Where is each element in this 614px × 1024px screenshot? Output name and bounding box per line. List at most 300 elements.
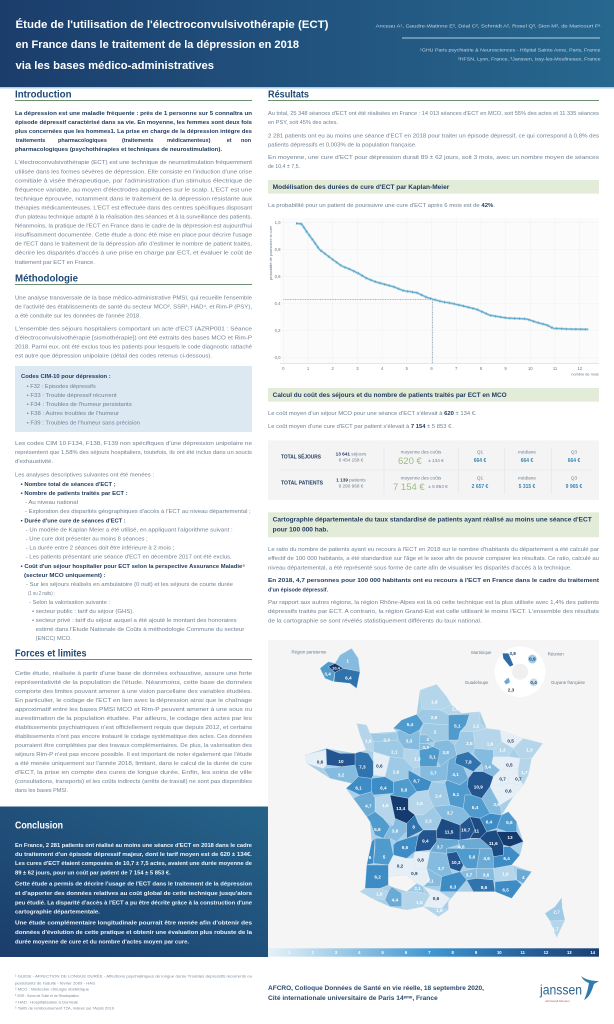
method note on codes: Les codes CIM 10 F134, F138, F139 non spécifiques d'une dépression unipolaire ne: [15, 441, 252, 447]
map: dark department values: 0,6: [505, 789, 512, 794]
intro key message: non: [241, 138, 252, 144]
colour scale legend: 3: [335, 950, 338, 955]
x axis labels: 8: [480, 366, 483, 371]
list of descriptive analyses: [15, 473, 251, 642]
list of descriptive analyses: (secteur MCO uniquement) :: [24, 573, 106, 579]
heading: résultats: Résultats: [268, 90, 309, 100]
intro key message: médicamenteux): [167, 138, 211, 144]
colour scale legend: 10: [497, 950, 502, 955]
y axis labels: [269, 220, 281, 360]
cartography text: [268, 547, 599, 624]
row: total patients: 7 154 €: [393, 482, 425, 493]
map: light department values: 1,7: [521, 770, 528, 775]
map: light department values: 1,6: [487, 742, 494, 747]
forces et limites body text: a été menée uniquement sur l'année 2018, limitant, dans le calcul de la durée de cure: [15, 761, 252, 767]
map: light department values: 3,3: [406, 739, 413, 744]
method note on codes: [15, 441, 252, 465]
cartography text: d'un épisode dépressif.: [268, 587, 328, 593]
title: [16, 18, 329, 72]
map: light department values: 3,8: [442, 750, 449, 755]
map: light department values: 1,3: [452, 707, 459, 712]
x axis labels: 1: [307, 366, 310, 371]
intro key message: [15, 111, 253, 153]
map: light department values: 4,6: [483, 856, 490, 861]
map: light department values: 10: [338, 759, 344, 764]
forces et limites body text: (consultations, transports) et les coûts indirects (arrêts de travail) ne sont pas disponibles: [15, 779, 252, 785]
row: total séjours: 8 454 158 €: [339, 457, 364, 462]
map: light department values: 3,7: [437, 845, 444, 850]
forces et limites body text: [15, 671, 253, 794]
callout: codes CIM-10: • F32 : Episodes dépressifs: [27, 384, 96, 390]
title: en France dans le traitement de la dépression en 2018: [16, 39, 299, 51]
row: total patients: 8 290 968 €: [339, 483, 364, 488]
conclusion paragraphs: Une étude complémentaire longitudinale pourrait être menée afin d'obtenir des: [15, 921, 252, 927]
intro body text: insuffisamment documentée. Cette étude a donc été mise en place pour décrire l'usage: [15, 233, 252, 239]
forces et limites body text: Cette étude, réalisée à partir d'une base de données exhaustive, assure une forte: [15, 671, 252, 677]
map: light department values: 1,8: [376, 892, 383, 897]
subheading: Kaplan-Meier: Modélisation des durées de cure d'ECT par Kaplan-Meier: [273, 184, 450, 191]
x axis labels: 2: [332, 366, 335, 371]
map: light department values: 3,4: [484, 764, 491, 769]
map: light department values: 2,6: [431, 715, 438, 720]
map: light department values: 6,3: [450, 884, 457, 889]
colour scale legend: 2: [312, 950, 315, 955]
row: total patients: ± 5 853 €: [428, 484, 448, 489]
map: light department values: 5,6: [506, 820, 513, 825]
row: total séjours: [281, 450, 580, 467]
footer conference reference: AFCRO, Colloque Données de Santé en vie réelle, 18 septembre 2020,: [268, 985, 484, 992]
cartography text: effectif de 100 000 habitants, a été standardisé sur l'âge et le sexe afin de pouvoir comparer les résultats. Ce ratio, calculé au: [268, 556, 599, 562]
map: light department values: 2,1: [391, 749, 398, 754]
map: light department values: 6,7: [413, 778, 420, 783]
intro body text: d'un plateau technique adapté à la réalisation des séances et à la surveillance des patients.: [15, 215, 252, 221]
affiliations: ²HFSN, Lyon, France, ³Janssen, Issy-les-Moulineaux, France: [458, 56, 601, 62]
y axis labels: 0,0: [275, 355, 281, 360]
map: light department values: 10,9: [474, 784, 483, 789]
method paragraph one: Une analyse transversale de la base médico-administrative PMSI, qui recueille l'ensemble: [15, 296, 252, 302]
y axis labels: 0,4: [275, 301, 281, 306]
list of descriptive analyses: (ENCC) MCO.: [36, 636, 72, 642]
conclusion paragraphs: En France, 2 281 patients ont réalisé au moins une séance d'ECT en 2018 dans le cadre: [15, 843, 252, 849]
logo: janssen: Johnson&Johnson: [545, 999, 570, 1003]
map: dark department values: 0,8: [417, 858, 424, 863]
list of descriptive analyses: • Durée d'une cure de séances d'ECT :: [21, 519, 126, 525]
panel: méthodologie: [15, 274, 253, 642]
title: via les bases médico-administratives: [16, 60, 214, 72]
inset: overseas departments: [465, 646, 586, 697]
colour scale legend: 4: [358, 950, 361, 955]
panel: conclusion: [0, 806, 268, 957]
callout: codes CIM-10: • F34 : Troubles de l'humeur persistants: [27, 402, 132, 408]
map: light department values: 6,4: [503, 856, 510, 861]
map: dark department values: 0,7: [499, 777, 506, 782]
map: light department values: 1,6: [416, 801, 423, 806]
map: light department values: 5,4: [407, 722, 414, 727]
map: light department values: 5,6: [469, 854, 476, 859]
conclusion paragraphs: données d'évolution de cette pratique et obtenir une évaluation plus robuste de la: [15, 930, 253, 936]
intro key message: plus concernées que les hommes1. La prise en charge de la dépression intègre des: [15, 129, 252, 135]
map: mainland departments: [305, 684, 565, 938]
map: light department values: 3,7: [447, 810, 454, 815]
inset: overseas departments: Guyane française: [551, 680, 586, 685]
list of descriptive analyses: - Un modèle de Kaplan Meier a été utilisé, en appliquant l'algorithme suivant :: [26, 528, 233, 534]
cartography text: Par rapport aux autres régions, la région Rhône-Alpes est là où cette technique est la plus utilisée avec 1,4% des patients: [268, 600, 599, 606]
subheading: cartographie: Cartographie départementale du taux standardisé de patients ayant réalisé au moins une séance d'ECT: [273, 516, 592, 523]
inset: région parisienne: 3,4: [324, 672, 331, 677]
colour scale legend: [268, 948, 599, 957]
subheading: cartographie: pour 100 000 hab.: [273, 526, 329, 533]
map: light department values: 3,6: [483, 873, 490, 878]
y axis labels: 1,0: [275, 220, 281, 225]
cost statements: Le coût moyen d'une cure d'ECT par patient s'élevait à 7 154 ± 5 853 €.: [268, 424, 454, 430]
title: Étude de l'utilisation de l'électroconvulsivothérapie (ECT): [16, 18, 329, 31]
map: light department values: 1,9: [502, 871, 509, 876]
inset: région parisienne: 1: [346, 658, 349, 663]
cartography text: niveau départemental, a été représenté sous forme de carte afin de visualiser les disparités d'accès à la technique.: [268, 565, 572, 571]
subheading: cost: [268, 388, 599, 402]
map: light department values: 1,6: [436, 908, 443, 913]
footnotes: ⁵ Tarifs de remboursement T2A, indexé sur l'Assis 2019: [15, 1006, 114, 1010]
heading: introduction: Introduction: [15, 90, 72, 100]
map: light department values: 1,1: [473, 724, 480, 729]
inset: région parisienne: Région parisienne: [292, 650, 327, 655]
intro body text: de l'ECT dans le traitement de la dépression afin d'estimer le nombre de patient traités,: [15, 242, 253, 248]
cartography text: En 2018, 4,7 personnes pour 100 000 habitants ont eu recours à l'ECT en France dans le cadre du traitement: [268, 578, 599, 584]
results summary text: En moyenne, une cure d'ECT pour dépression durait 89 ± 62 jours, soit 3 mois, avec un nombre moyen de séances: [268, 155, 599, 161]
row: total patients: moyenne des coûts: [401, 476, 442, 481]
results summary text: patients dépressifs et 0,003% de la population française.: [268, 143, 417, 149]
map: dark department values: 0,5: [506, 763, 513, 768]
map: dark department values: 0,9: [411, 871, 418, 876]
map: light department values: 3,1: [427, 879, 434, 884]
row: total séjours: 620 €: [398, 456, 422, 467]
map: light department values: 6,2: [374, 875, 381, 880]
colour scale legend: 11: [520, 950, 526, 955]
results summary text: 2 281 patients ont eu au moins une séance d'ECT en 2018 pour traiter un épisode dépressif, ce qui correspond à 0,8% des: [268, 134, 599, 140]
panel: map of France: [268, 640, 599, 948]
inset: overseas departments: 0,4: [530, 680, 537, 685]
map: light department values: 3,7: [430, 770, 437, 775]
map: light department values: 5,8: [401, 788, 408, 793]
map: light department values: 5,1: [454, 724, 461, 729]
list of descriptive analyses: Les analyses descriptives suivantes ont été menées :: [15, 473, 154, 479]
list of descriptive analyses: • secteur public : tarif du séjour (GHS).: [32, 609, 135, 615]
row: total séjours: 664 €: [474, 458, 486, 464]
logo: janssen: janssen: [539, 982, 582, 998]
method paragraph one: de l'activité des établissements de santé du secteur MCO², SSR³, HAD⁴, et Rim-P (PSY),: [15, 304, 253, 311]
map: light department values: 1,3: [526, 748, 533, 753]
subheading: cost: Calcul du coût des séjours et du nombre de patients traités par ECT en MCO: [273, 392, 507, 399]
map: dark department values: 0,2: [397, 864, 404, 869]
Kaplan-Meier statement: La probabilité pour un patient de poursuivre une cure d'ECT après 6 mois est de 42%.: [268, 203, 496, 209]
list of descriptive analyses: (1 ou 2 nuits) ;: [28, 591, 55, 597]
callout: codes CIM-10: • F39 : Troubles de l'humeur sans précision: [27, 421, 140, 427]
map: light department values: 9,4: [422, 839, 429, 844]
callout: codes CIM-10: • F38 : Autres troubles de l'humeur: [27, 411, 119, 417]
intro body text: thérapies médicamenteuses. L'ECT est effectuée dans des centres spécifiques disposant: [15, 206, 253, 212]
map: light department values: 6,4: [380, 785, 387, 790]
heading: méthodologie: Méthodologie: [15, 274, 78, 284]
results summary text: Au total, 25 348 séances d'ECT ont été réalisées en France : 14 013 séances d'ECT en MCO, soit 55% des actes et 11 335 séances: [268, 111, 599, 117]
map: light department values: 3: [426, 737, 429, 742]
x axis labels: [282, 366, 599, 376]
row: total séjours: moyenne des coûts: [401, 450, 442, 455]
conclusion paragraphs: cartographie départementale.: [15, 909, 100, 915]
map: light department values: 4: [522, 875, 525, 880]
conclusion paragraphs: du traitement d'un épisode dépressif majeur, dont le tarif moyen est de 620 ± 134€.: [15, 852, 252, 858]
map: light department values: 3,8: [392, 829, 399, 834]
forces et limites body text: approximatif entre les bases PMSI MCO et Rim-P peuvent amener à une sous ou: [15, 707, 252, 713]
map: light department values: 2,3: [425, 819, 432, 824]
colour scale legend: 5: [382, 950, 385, 955]
x axis labels: 12: [577, 366, 583, 371]
header banner: [0, 0, 614, 88]
map: light department values: 13: [507, 835, 513, 840]
intro key message: pharmacologiques (psychothérapies et techniques de neurostimulation).: [15, 147, 223, 153]
map: light department values: 10,3: [451, 860, 461, 865]
map: Corsica values: 1,7: [552, 927, 559, 932]
heading: forces et limites: Forces et limites: [15, 648, 87, 660]
cartography text: Le ratio du nombre de patients ayant eu recours à l'ECT en 2018 sur le nombre d'habitants du département a été calculé par: [268, 547, 599, 553]
map: light department values: 7,3: [359, 764, 366, 769]
footnotes: persistants de l'adulte - février 2009 - HAS: [15, 982, 96, 986]
list of descriptive analyses: • Nombre de patients traités par ECT :: [21, 491, 128, 497]
x axis labels: 4: [381, 366, 384, 371]
map: dark department values: 0,7: [515, 777, 522, 782]
map: light department values: 5,1: [429, 754, 436, 759]
intro body text: Néanmoins, la pratique de l'ECT en France dans le cadre de la dépression est aujourd'hui: [15, 224, 252, 230]
map: dark department values: 0,6: [317, 759, 324, 764]
map: light department values: 4,4: [392, 898, 399, 903]
map: light department values: 2,3: [383, 738, 390, 743]
method paragraph one: a été conduite sur les données de l'année 2018.: [15, 314, 141, 320]
callout: codes CIM-10: Codes CIM-10 pour dépression :: [21, 374, 111, 380]
forces et limites body text: dans les bases PMSI.: [15, 788, 68, 794]
row: total patients: 2 657 €: [472, 484, 489, 490]
forces et limites body text: représentativité de la population de l'étude. Néanmoins, cette base de données: [15, 680, 252, 686]
colour scale legend: 13: [567, 950, 572, 955]
forces et limites body text: séjours Rim-P n'est pas encore possible. Il est important de noter également que l'étude: [15, 752, 252, 758]
chart: Kaplan-Meier curve: [269, 218, 599, 376]
row: total séjours: ± 134 €: [428, 458, 444, 463]
x axis labels: 11: [553, 366, 558, 371]
map: light department values: 2,5: [466, 741, 473, 746]
map: dark department values: 0,6: [376, 764, 383, 769]
row: total patients: 1 139 patients: [336, 477, 366, 482]
forces et limites body text: comporte des limites pouvant amener à une vision parcellaire des variables étudiées.: [15, 689, 253, 695]
y axis labels: 0,2: [275, 328, 281, 333]
list of descriptive analyses: - La durée entre 2 séances doit être inférieure à 2 mois ;: [26, 546, 175, 552]
panel: forces et limites: [15, 648, 253, 794]
method paragraph one: [15, 296, 253, 320]
results summary text: [268, 111, 599, 170]
inset: région parisienne: 6,4: [345, 675, 352, 680]
map: light department values: 7,8: [465, 759, 472, 764]
map: light department values: 5,4: [472, 805, 479, 810]
footer conference reference: Cité internationale universitaire de Paris 14ᵉᵐᵉ, France: [268, 995, 438, 1002]
method paragraph two: [15, 327, 252, 360]
callout: codes CIM-10: • F33 : Trouble dépressif récurrent: [27, 393, 117, 399]
intro key message: La dépression est une maladie fréquente : près de 1 personne sur 5 connaîtra un: [15, 111, 253, 117]
map: light department values: 4,7: [365, 804, 372, 809]
list of descriptive analyses: • Coût d'un séjour hospitalier pour ECT selon la perspective Assurance Maladie⁵: [21, 564, 245, 570]
forces et limites body text: établissements n'ont pas encore instauré le codage systématique des actes. Ces données: [15, 734, 252, 740]
intro body text: fréquence variable, au moyen d'électrodes appliquées sur le scalp. L'ECT est une: [15, 188, 252, 194]
colour scale legend: 6: [405, 950, 408, 955]
row: total patients: 9 965 €: [566, 484, 583, 490]
conclusion paragraphs: Cette étude a permis de décrire l'usage de l'ECT dans le traitement de la dépression: [15, 882, 253, 888]
x axis labels: 9: [504, 366, 507, 371]
conclusion paragraphs: peu étudié. La disparité d'accès à l'ECT a pu être décrite grâce à la construction d'une: [15, 900, 252, 906]
map: dark department values: 0,5: [507, 739, 514, 744]
conclusion paragraphs: et d'apporter des données relatives au coût global de cette technique jusqu'alors: [15, 891, 252, 897]
colour scale legend: 8: [452, 950, 455, 955]
row: total patients: Q3: [571, 476, 578, 481]
list of descriptive analyses: - Sur les séjours réalisés en ambulatoire (0 nuit) et les séjours de courte durée: [26, 582, 233, 588]
x axis labels: 7: [455, 366, 458, 371]
heading: conclusion: Conclusion: [15, 820, 63, 832]
forces et limites body text: pourraient être complétées par des travaux complémentaires. De plus, la valorisation des: [15, 743, 252, 749]
authors: Anceau A¹, Gaudre-Watinne E², Déal C², Schmidt A², Rosel Q³, Sion M², de Maricourt P¹: [376, 23, 601, 29]
forces et limites body text: d'ECT, la prise en compte des cures de longue durée. Enfin, les soins de ville: [15, 770, 252, 776]
map: light department values: 10,7: [461, 828, 471, 833]
list of descriptive analyses: - Exploration des disparités géographiques d'accès à l'ECT au niveau départemental ;: [25, 509, 251, 515]
row: total séjours: 664 €: [568, 458, 580, 464]
footnotes: [15, 973, 252, 1010]
cartography text: dépressifs traités par ECT. A contrario, la région Grand-Est est celle utilisant le moins l'ECT. L'ensemble des résultats: [268, 609, 599, 615]
x axis labels: 0: [282, 366, 285, 371]
row: total séjours: 13 641 séjours: [336, 452, 367, 457]
conclusion paragraphs: 89 ± 62 jours, pour un coût par patient de 7 154 ± 5 853 €.: [15, 870, 171, 876]
affiliations: ¹GHU Paris psychiatrie & Neurosciences - Hôpital Sainte Anne, Paris, France: [420, 48, 601, 52]
footnotes: ² MCO : Médecine chirurgie obstétrique: [15, 988, 89, 992]
map: light department values: 2: [434, 729, 437, 734]
map: light department values: 11,5: [445, 829, 454, 834]
conclusion paragraphs: durée moyenne de cure et du nombre d'actes moyen par cure.: [15, 939, 189, 945]
footnotes: ³ SSR : Soins de Suite et de Réadaptation: [15, 994, 79, 998]
list of descriptive analyses: - Les patients présentant une séance d'ECT en décembre 2017 ont été exclus.: [26, 555, 232, 561]
map: light department values: 13,4: [396, 806, 406, 811]
intro key message: traitements: [16, 138, 45, 144]
inset: overseas departments: 0,9: [529, 657, 536, 662]
affiliations: [420, 48, 601, 62]
map: light department values: 2,4: [435, 793, 442, 798]
map: light department values: 2,6: [393, 769, 400, 774]
method note on codes: d'exhaustivité.: [15, 459, 54, 465]
x axis labels: 3: [356, 366, 359, 371]
map: light department values: 1,3: [414, 757, 421, 762]
footer conference reference: [268, 985, 484, 1002]
inset: overseas departments: 3,8: [509, 651, 516, 656]
cartography text: de la cartographie se sont révélés statistiquement différents du taux national.: [268, 618, 482, 624]
map: light department values: 6,5: [402, 845, 409, 850]
x axis labels: 10: [528, 366, 533, 371]
x axis labels: nombre de mois: [571, 372, 599, 376]
intro body text: décrire les disparités d'accès à une prise en charge par ECT, et évaluer le coût de: [15, 251, 252, 257]
method paragraph two: est autre que dépression unipolaire (détail des codes retenus ci-dessous).: [15, 354, 213, 360]
map: dark department values: [317, 739, 522, 901]
y axis labels: 0,8: [275, 247, 281, 252]
intro key message: épisode dépressif caractérisé dans sa vie. En moyenne, les femmes sont deux fois: [15, 120, 252, 126]
list of descriptive analyses: estimé dans l'Etude Nationale de Coûts à méthodologie Commune du secteur: [36, 627, 244, 633]
list of descriptive analyses: - Selon la valorisation suivante :: [29, 600, 110, 606]
results summary text: de 10,4 ± 7,5.: [268, 164, 300, 170]
method paragraph two: 2018. Parmi eux, ont été exclus tous les patients pour lesquels le code diagnostic rattaché: [15, 345, 252, 351]
map: light department values: 4,1: [452, 772, 459, 777]
panel: introduction: [15, 90, 253, 266]
row: total patients: TOTAL PATIENTS: [281, 480, 324, 486]
colour scale legend: 1: [288, 950, 291, 955]
map: light department values: 8: [412, 824, 415, 829]
conclusion paragraphs: [15, 843, 253, 945]
subheading: cartographie: [268, 512, 599, 537]
map: dark department values: 0,6: [433, 896, 440, 901]
row: total patients: 5 315 €: [519, 484, 536, 490]
map: light department values: 4,8: [458, 844, 465, 849]
inset: overseas departments: Guadeloupe: [465, 680, 489, 685]
map: light department values: 1,6: [382, 803, 389, 808]
footnotes: ⁴ HAD : Hospitalisation à Domicile: [15, 1000, 78, 1004]
inset: overseas departments: Martinique: [471, 650, 492, 655]
row: total patients: Q1: [477, 476, 484, 481]
y axis labels: 0,6: [275, 274, 281, 279]
map: light department values: 1,6: [365, 739, 372, 744]
map: light department values: 11,6: [489, 841, 498, 846]
row: total séjours: TOTAL SÉJOURS: [281, 452, 322, 460]
colour scale legend: 14: [590, 950, 596, 955]
row: total séjours: Q1: [477, 450, 484, 455]
map: light department values: 2,1: [414, 886, 421, 891]
map: light department values: [338, 699, 533, 913]
map: silhouette of mainland France: [305, 684, 543, 917]
map: light department values: 3,2: [338, 773, 345, 778]
map: light department values: 3,7: [438, 866, 445, 871]
inset: overseas departments: Réunion: [548, 651, 564, 656]
intro key message: (traitements: [122, 138, 153, 144]
survival curve: [283, 223, 588, 363]
list of descriptive analyses: - Une cure doit présenter au moins 8 séances ;: [26, 537, 148, 543]
intro key message: et: [227, 138, 232, 144]
callout: codes CIM-10: [15, 366, 252, 432]
footnotes: ¹ GUIDE - AFFECTION DE LONGUE DURÉE - Affections psychiatriques de longue durée Troubles dépressifs récurrents ou: [15, 973, 252, 978]
method note on codes: représentent que 1,58% des séjours hospitaliers, toutefois, ils ont été inclus dans un soucis: [15, 450, 252, 456]
logo: janssen: [539, 976, 599, 1003]
cost statements: [268, 411, 477, 430]
cost table: [268, 440, 599, 500]
method paragraph two: d'électroconvulsivothérapie [sismothérapie]) ont été extraits des bases MCO et Rim-P: [15, 336, 252, 342]
x axis labels: 6: [430, 366, 433, 371]
map: Corsica values: [552, 909, 560, 932]
colour scale legend: 12: [544, 950, 549, 955]
results summary text: en PSY, soit 45% des actes.: [268, 120, 338, 126]
forces et limites body text: établissements psychiatriques n'est officiellement requis que depuis 2012, et certains: [15, 725, 252, 731]
conclusion paragraphs: Les cures d'ECT étaient composées de 10,7 ± 7,5 actes, avaient une durée moyenne de: [15, 861, 252, 867]
subheading: Kaplan-Meier: [268, 180, 599, 194]
map: light department values: 1,5: [416, 900, 423, 905]
map: light department values: 6,1: [355, 785, 362, 790]
forces et limites body text: surestimation de la population étudiée. Par ailleurs, le codage des actes par les: [15, 716, 252, 722]
inset: région parisienne: [292, 648, 360, 688]
map: light department values: 1,8: [431, 699, 438, 704]
intro body text: L'électroconvulsivothérapie (ECT) est une technique de neurostimulation fréquemment: [15, 160, 253, 166]
inset: région parisienne: 10,4: [332, 666, 341, 671]
colour scale legend: 7: [428, 950, 431, 955]
list of descriptive analyses: • Nombre total de séances d'ECT ;: [21, 482, 116, 488]
row: total patients: [281, 476, 583, 493]
inset: overseas departments: 2,3: [508, 688, 515, 693]
intro body text: utilisée dans les formes sévères de dépression. Elle consiste en l'induction d'une crise: [15, 170, 252, 176]
row: total séjours: 664 €: [521, 458, 533, 464]
